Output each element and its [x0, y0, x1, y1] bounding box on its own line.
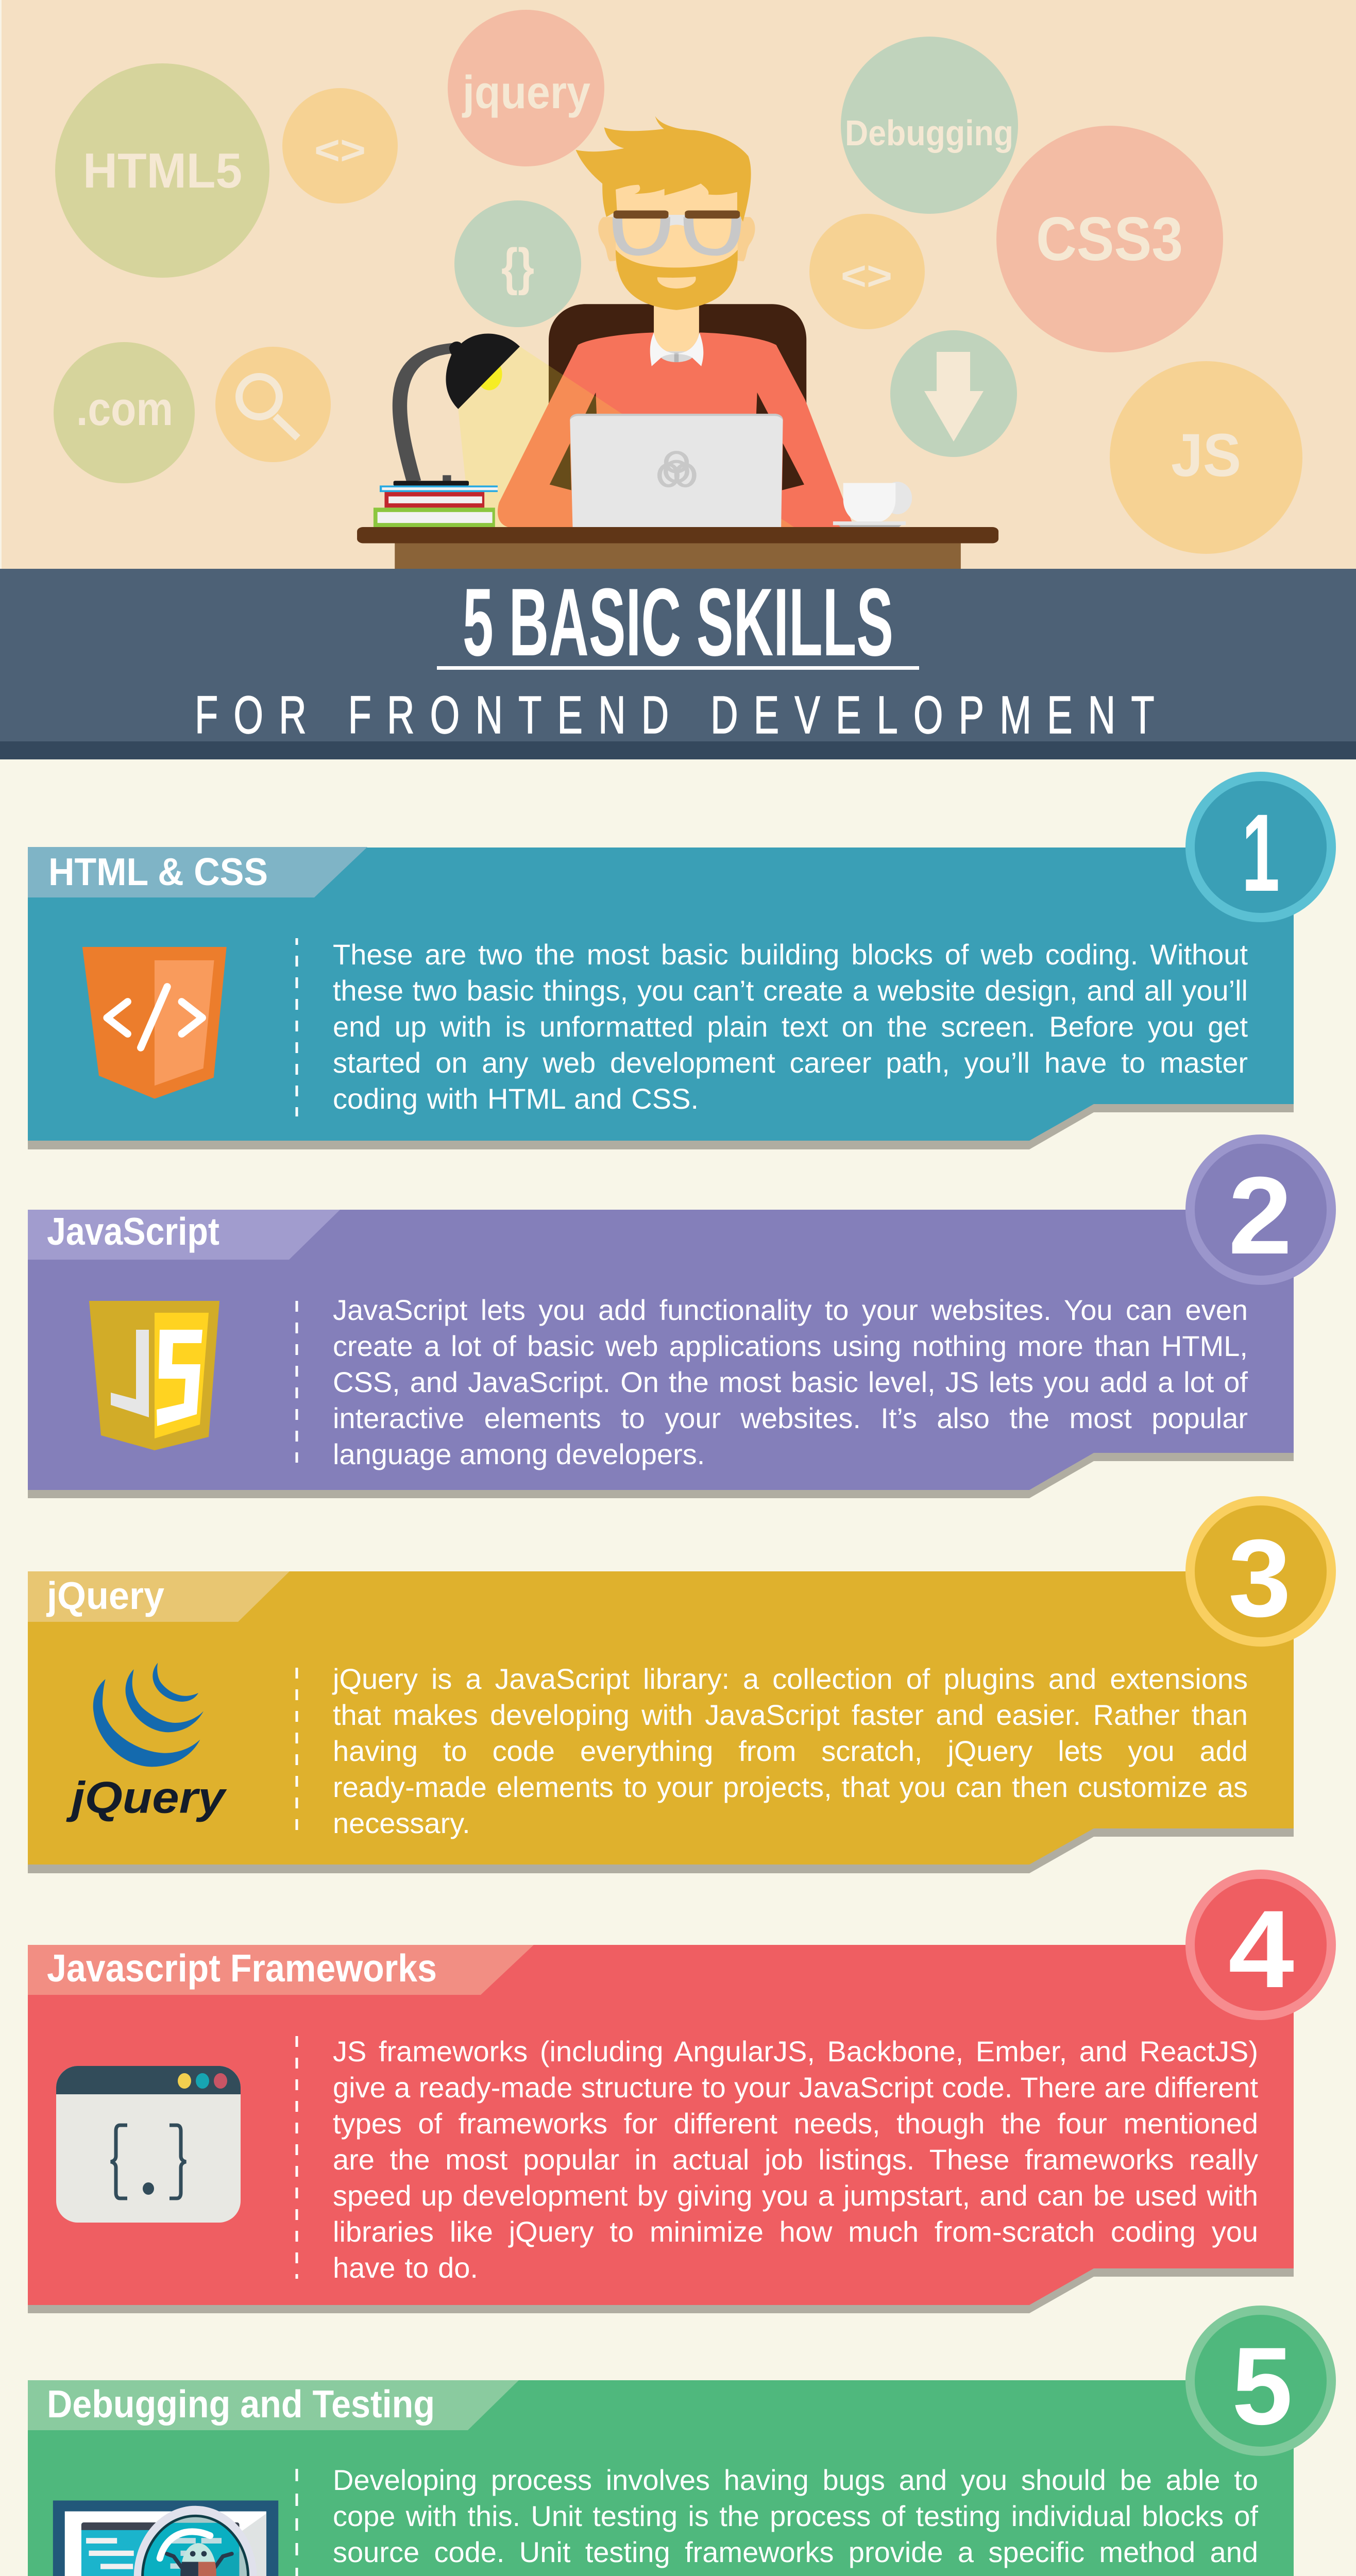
face: [616, 184, 738, 272]
glasses: [614, 210, 740, 252]
text: Javascript Frameworks description: speed up development by giving you a jumpstart, and can be used with: [333, 2179, 1258, 2212]
character at desk: [357, 116, 998, 570]
bubble: CSS3: CSS3: [1036, 205, 1183, 274]
lamp base: [394, 475, 469, 486]
number badge 3: 3: [1228, 1517, 1291, 1640]
beard: [616, 250, 738, 310]
text: jQuery description: having to code everything from scratch, jQuery lets you add: [333, 1735, 1248, 1767]
tab heading: jQuery: [46, 1574, 164, 1617]
text: JavaScript description: [333, 1294, 1248, 1470]
lamp arm: [400, 348, 454, 481]
text: jQuery description: ready-made elements to your projects, that you can then customize as: [333, 1771, 1248, 1803]
tab heading: JavaScript: [47, 1210, 219, 1253]
bubble: Debugging: [841, 37, 1018, 214]
bubble: angle brackets left: <>: [314, 127, 366, 173]
icon: JS shield: [89, 1301, 219, 1450]
tab heading: Javascript Frameworks: [47, 1946, 437, 1990]
text: HTML & CSS description: [333, 938, 1248, 1115]
main title: 5 BASIC SKILLS: [463, 569, 893, 676]
text: jQuery description: jQuery is a JavaScript library: a collection of plugins and extensions: [333, 1663, 1248, 1695]
panel: jQuery: [28, 1496, 1336, 1873]
bubble: Debugging: Debugging: [845, 113, 1013, 153]
icon: monitor with magnifier and bug: [53, 2500, 278, 2576]
desk: [357, 527, 998, 570]
tab heading: HTML & CSS: [48, 850, 268, 893]
collar: [650, 332, 703, 366]
text: Javascript Frameworks description: types of frameworks for different needs, though the four mentioned: [333, 2107, 1258, 2140]
text: Debugging and Testing description: cope with this. Unit testing is the process of testing individual blocks of: [333, 2500, 1258, 2532]
bubble: jquery: [448, 10, 604, 166]
number badge 2: [1190, 1139, 1331, 1280]
text: Javascript Frameworks description: [333, 2035, 1258, 2284]
panel: JavaScript: [28, 1134, 1336, 1498]
text: Javascript Frameworks description: libraries like jQuery to minimize how much from-scratch coding you: [333, 2215, 1258, 2248]
text: Debugging and Testing description: Developing process involves having bugs and you should be able to: [333, 2464, 1258, 2496]
bubble: jquery: jquery: [462, 67, 590, 118]
icon: HTML shield: [82, 947, 227, 1099]
number badge 1: [1190, 776, 1331, 918]
text: JavaScript description: CSS, and JavaScript. On the most basic level, JS lets you add a lot of: [333, 1366, 1248, 1398]
text: JavaScript description: interactive elements to your websites. It’s also the most popular: [333, 1402, 1248, 1434]
text: HTML & CSS description: coding with HTML and CSS.: [333, 1082, 699, 1115]
text: JavaScript description: language among developers.: [333, 1438, 705, 1470]
neck: [654, 303, 699, 359]
text: Debugging and Testing description: source code. Unit testing frameworks provide a specific method and: [333, 2536, 1258, 2568]
text: HTML & CSS description: end up with is unformatted plain text on the screen. Before you get: [333, 1010, 1248, 1043]
text: Javascript Frameworks description: have to do.: [333, 2251, 478, 2284]
number badge 5: 5: [1232, 2325, 1293, 2448]
bubble: angle brackets left: [282, 88, 398, 204]
title band: [0, 569, 1356, 759]
bubble: angle brackets right: <>: [841, 253, 892, 298]
bubble: .com: .com: [76, 383, 173, 435]
text: JavaScript description: JavaScript lets you add functionality to your websites. You can even: [333, 1294, 1248, 1326]
bubble: angle brackets right: [809, 214, 925, 329]
text: Javascript Frameworks description: give a ready-made structure to your JavaScript code. There are different: [333, 2071, 1258, 2104]
lamp bulb: [477, 358, 502, 391]
number badge 1: 1: [1242, 791, 1280, 914]
lamp shade: [446, 334, 520, 409]
books: [374, 485, 498, 527]
tab heading: [28, 1571, 290, 1622]
hair: [576, 116, 751, 222]
bubble: HTML5: HTML5: [83, 143, 242, 198]
bubble: JS: JS: [1171, 421, 1241, 489]
ears: [598, 217, 755, 261]
panel: Debugging and Testing: [28, 2306, 1336, 2576]
number badge 3: [1190, 1501, 1331, 1642]
text: jQuery description: necessary.: [333, 1807, 470, 1839]
panel: Javascript Frameworks: [28, 1870, 1336, 2313]
number badge 4: [1190, 1874, 1331, 2015]
text: jQuery description: [332, 1663, 1248, 1839]
icon: code window: [56, 2066, 241, 2223]
sweater: [498, 332, 854, 527]
lamp light beam: [458, 347, 794, 527]
text: JavaScript description: create a lot of basic web applications using nothing more than HTML,: [333, 1330, 1248, 1362]
bubble: curly braces: [454, 200, 581, 327]
mouth: [657, 277, 696, 289]
bubble: download arrow: [890, 330, 1017, 457]
number badge 5: [1190, 2310, 1331, 2451]
text: Debugging and Testing description: [333, 2462, 1258, 2576]
icon: jQuery logo: jQuery: [65, 1773, 227, 1822]
text: Javascript Frameworks description: JS frameworks (including AngularJS, Backbone, Ember, and ReactJS): [333, 2035, 1258, 2067]
panel: HTML & CSS: [28, 772, 1336, 1149]
number badge 4: 4: [1228, 1888, 1294, 2011]
number badge 2: 2: [1228, 1154, 1292, 1277]
tab heading: Debugging and Testing: [47, 2382, 435, 2426]
tab heading: [28, 847, 367, 897]
bubble: magnifier: [215, 347, 331, 462]
coffee cup: [833, 482, 912, 527]
text: HTML & CSS description: started on any web development career path, you’ll have to master: [333, 1046, 1248, 1079]
chair: [549, 304, 806, 515]
bubble: CSS3: [996, 126, 1223, 352]
icon: jQuery logo: [65, 1663, 227, 1822]
bubble: HTML5: [55, 63, 269, 278]
text: jQuery description: that makes developing with JavaScript faster and easier. Rather than: [333, 1699, 1248, 1731]
text: Javascript Frameworks description: are the most popular in actual job listings. These frameworks really: [333, 2143, 1258, 2176]
subtitle: FOR FRONTEND DEVELOPMENT: [195, 686, 1155, 745]
bubble: JS: [1110, 361, 1302, 554]
laptop: [570, 414, 783, 527]
text: HTML & CSS description: these two basic things, you can’t create a website design, and all you’ll: [333, 974, 1248, 1007]
bubble: .com: [54, 342, 195, 483]
tab heading: [28, 1210, 340, 1260]
text: HTML & CSS description: These are two the most basic building blocks of web coding. Without: [333, 938, 1248, 971]
header illustration: [2, 0, 1356, 569]
bubble: curly braces: {}: [501, 238, 534, 296]
arm gaps: [550, 393, 804, 490]
